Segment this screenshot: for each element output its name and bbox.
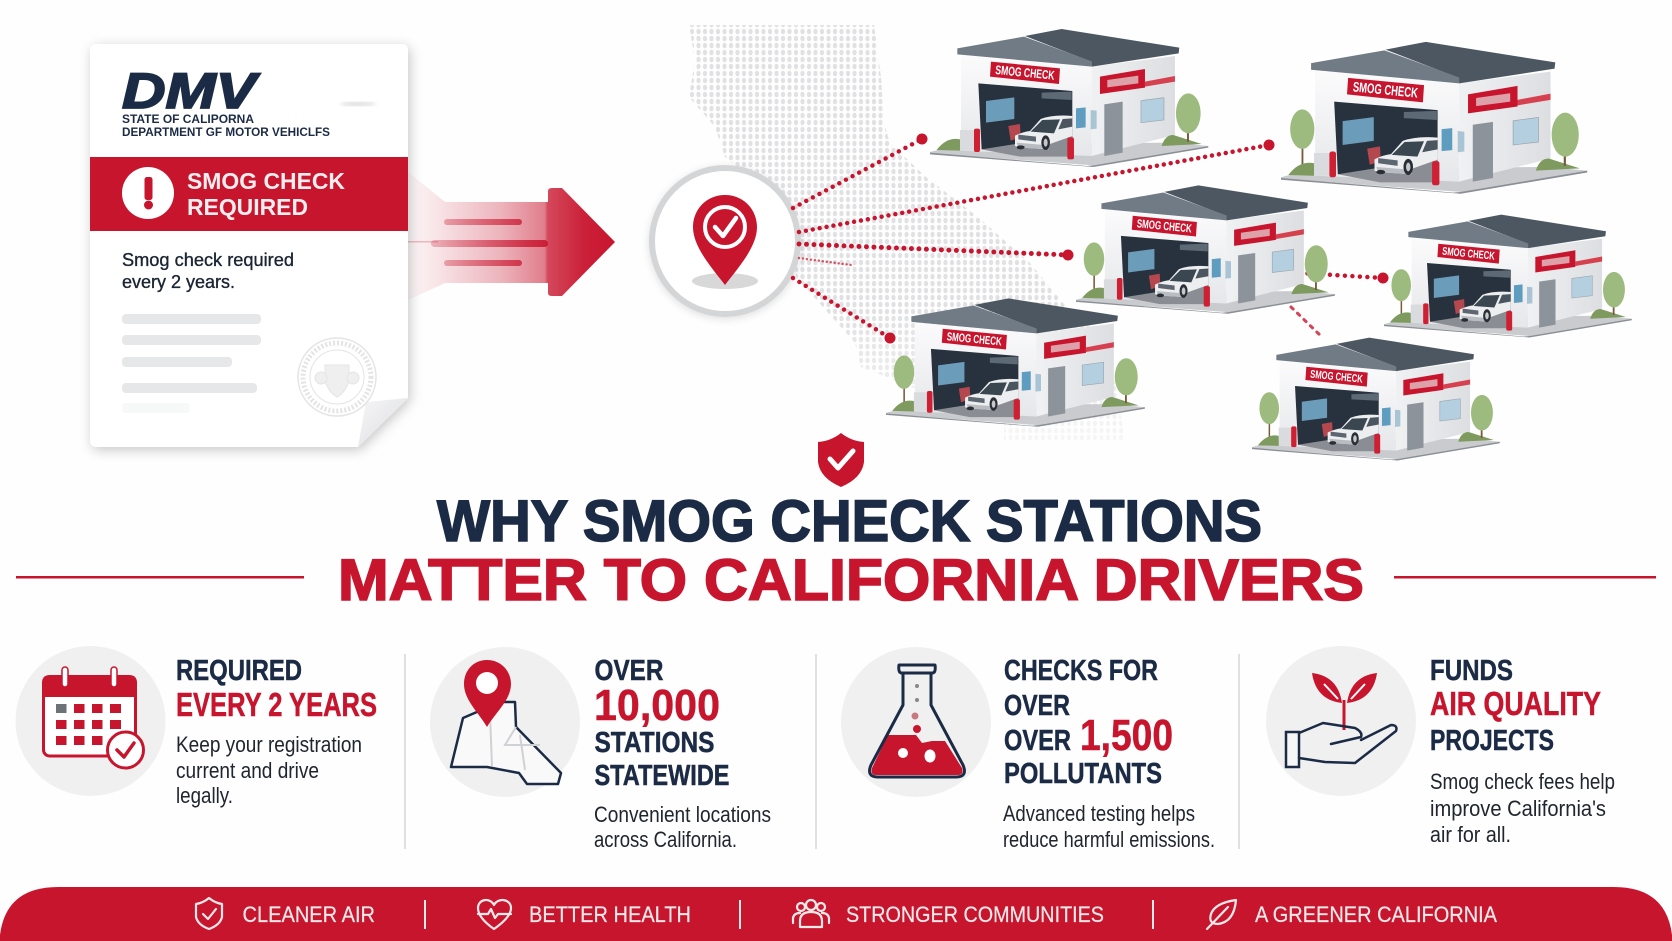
icon: map pin	[693, 195, 757, 285]
divider	[815, 654, 817, 849]
placeholder lines	[122, 314, 261, 413]
red alert band	[90, 157, 408, 231]
body text	[176, 732, 362, 808]
heading: EVERY 2 YEARS	[176, 686, 377, 723]
connector end dots	[884, 134, 1388, 344]
badge ring	[652, 168, 798, 314]
label: CLEANER AIR	[242, 902, 375, 927]
icon: people	[793, 900, 829, 927]
body text	[594, 802, 771, 852]
smog station 3	[1076, 185, 1335, 314]
body text: legally.	[176, 783, 233, 808]
icon: check ring	[705, 207, 745, 247]
faint smudge	[340, 102, 376, 106]
smog station 6	[1252, 338, 1500, 460]
smog station 2: SMOG CHECK	[1352, 78, 1419, 101]
body text: Keep your registration	[176, 732, 362, 757]
heading: OVER	[594, 655, 664, 687]
heading	[1004, 655, 1173, 790]
heading: STATIONS	[594, 727, 714, 759]
label: A GREENER CALIFORNIA	[1255, 902, 1497, 927]
bottom benefits band	[0, 887, 1672, 941]
state seal	[298, 338, 376, 416]
icon: hand with sprout	[1266, 646, 1416, 796]
DMV logo: DMV	[122, 63, 260, 119]
agency name: STATE OF CALIPORNA	[122, 114, 254, 126]
icon: pin on California map	[430, 647, 580, 797]
body text	[1430, 769, 1615, 847]
California dotted map	[689, 25, 1125, 440]
body text: Smog check fees help	[1430, 769, 1615, 794]
icon: flask	[841, 647, 991, 797]
alert text: SMOG CHECK	[187, 168, 345, 194]
heading: REQUIRED	[176, 655, 302, 687]
heading: FUNDS	[1430, 655, 1513, 687]
body text: air for all.	[1430, 822, 1511, 847]
document page	[90, 44, 408, 447]
heading: OVER	[1004, 725, 1071, 757]
agency name: DEPARTMENT GF MOTOR VEHICLFS	[122, 127, 330, 139]
body text: Convenient locations	[594, 802, 771, 827]
smog station 3: SMOG CHECK	[1136, 217, 1193, 236]
document text	[122, 250, 294, 292]
body text: reduce harmful emissions.	[1003, 827, 1215, 852]
body text: Advanced testing helps	[1003, 801, 1195, 826]
heading	[176, 655, 377, 723]
label: BETTER HEALTH	[529, 902, 691, 927]
title: MATTER TO CALIFORNIA DRIVERS	[338, 548, 1364, 613]
panel: funds air quality projects	[1266, 646, 1615, 847]
alert text	[187, 168, 345, 220]
icon: calendar	[16, 646, 166, 796]
divider	[404, 654, 406, 849]
smog station 4	[1384, 215, 1632, 337]
heading: CHECKS FOR	[1004, 655, 1158, 687]
panel: required every 2 years	[16, 646, 377, 808]
title	[338, 489, 1364, 613]
icon: leaf	[1207, 900, 1236, 929]
heading: STATEWIDE	[594, 760, 730, 792]
heading: 10,000	[594, 681, 720, 730]
document text: Smog check required	[122, 250, 294, 270]
heading: 1,500	[1080, 711, 1173, 760]
title rule left	[16, 576, 304, 578]
body text	[1003, 801, 1215, 852]
document text: every 2 years.	[122, 272, 235, 292]
body text: across California.	[594, 827, 737, 852]
arrow from document to pin	[408, 172, 615, 300]
smog station 4: SMOG CHECK	[1442, 246, 1496, 263]
title: WHY SMOG CHECK STATIONS	[437, 489, 1262, 554]
pin shadow	[692, 273, 758, 289]
central location pin badge	[652, 168, 798, 314]
smog station 6: SMOG CHECK	[1310, 369, 1364, 386]
icon: exclamation	[122, 167, 174, 219]
heading: OVER	[1004, 690, 1070, 722]
divider	[1238, 654, 1240, 849]
icon: shield	[196, 898, 222, 929]
title rule right	[1394, 576, 1656, 578]
smog station 1: SMOG CHECK	[995, 63, 1056, 83]
heading: POLLUTANTS	[1004, 758, 1162, 790]
DMV document	[90, 44, 408, 447]
smog station 5	[886, 298, 1145, 427]
smog station 5: SMOG CHECK	[946, 330, 1003, 349]
heading	[594, 655, 730, 792]
label: STRONGER COMMUNITIES	[846, 902, 1104, 927]
dotted connector lines	[793, 139, 1383, 338]
smog station 2	[1281, 42, 1587, 194]
icon: heart	[478, 900, 511, 929]
heading	[1430, 655, 1601, 757]
band background	[0, 887, 1672, 941]
heading: PROJECTS	[1430, 725, 1554, 757]
agency name	[122, 114, 330, 139]
smog station 1	[930, 29, 1208, 167]
band separators	[424, 900, 1154, 929]
heading: AIR QUALITY	[1430, 685, 1601, 722]
body text: improve California's	[1430, 796, 1606, 821]
panel: over 10,000 stations	[430, 647, 771, 852]
panel: checks for over 1,500 pollutants	[841, 647, 1215, 852]
page fold	[358, 398, 408, 447]
icon: shield check	[818, 433, 864, 487]
body text: current and drive	[176, 758, 319, 783]
alert text: REQUIRED	[187, 194, 308, 220]
